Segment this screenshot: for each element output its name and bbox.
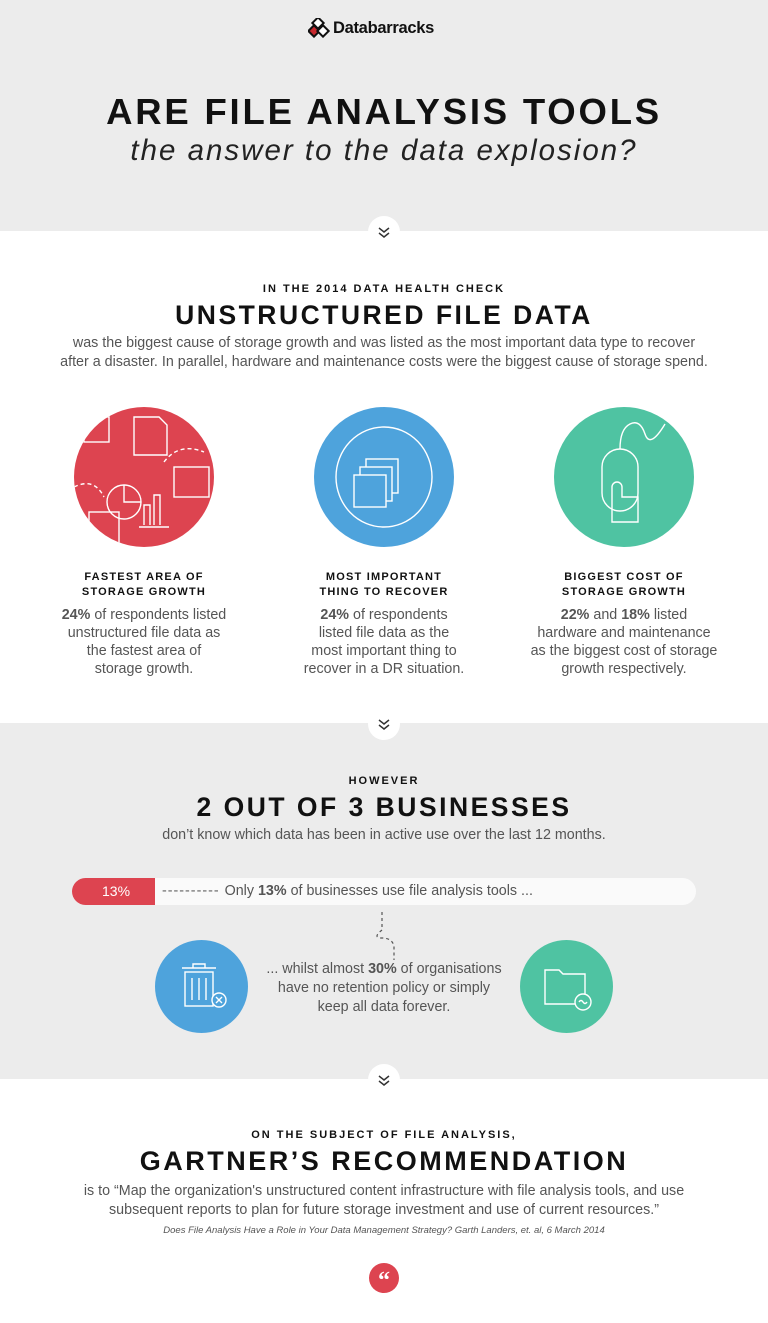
icon: quote — [369, 1263, 399, 1293]
retention text: keep all data forever. — [318, 999, 450, 1015]
icon: folder infinity circle — [520, 940, 613, 1033]
text: after a disaster. In parallel, hardware and maintenance costs were the biggest cause of storage spend. — [60, 354, 708, 370]
section heading 2: HOWEVER — [349, 775, 419, 787]
column 3 text: growth respectively. — [561, 661, 687, 677]
icon: blue recover circle — [314, 407, 454, 547]
bar: 13%: ---------- Only 13% of businesses use file analysis tools ... — [162, 883, 533, 899]
icon: red growth circle — [74, 407, 214, 547]
column 2 text: listed file data as the — [319, 625, 449, 641]
icon: quote: “ — [378, 1268, 390, 1294]
retention text: ... whilst almost 30% of organisations — [266, 961, 502, 977]
column 3 text: STORAGE GROWTH — [562, 586, 686, 598]
chevron 2 — [368, 708, 400, 740]
chevron 1 — [368, 216, 400, 248]
column 1 text: 24% of respondents listed — [62, 607, 226, 623]
column 1 text: the fastest area of — [87, 643, 201, 659]
column 3 text: hardware and maintenance — [537, 625, 711, 641]
retention text — [266, 961, 502, 1015]
icon: green mouse circle — [554, 407, 694, 547]
column 2 text: THING TO RECOVER — [319, 586, 448, 598]
text: subsequent reports to plan for future storage investment and use of current resources.” — [109, 1202, 659, 1218]
text: was the biggest cause of storage growth and was listed as the most important data type to recover — [73, 335, 695, 351]
chevron 3 — [368, 1064, 400, 1096]
column 2 text: MOST IMPORTANT — [326, 571, 442, 583]
text: don’t know which data has been in active use over the last 12 months. — [162, 827, 606, 843]
column 2 text: most important thing to — [311, 643, 457, 659]
column 1 text: STORAGE GROWTH — [82, 586, 206, 598]
bar: 13%: 13% — [102, 883, 130, 899]
column 1 text: FASTEST AREA OF — [84, 571, 204, 583]
text: 2 OUT OF 3 BUSINESSES — [196, 792, 572, 822]
section heading 3: ON THE SUBJECT OF FILE ANALYSIS, — [251, 1129, 517, 1141]
icon: trash circle — [155, 940, 248, 1033]
title: ARE FILE ANALYSIS TOOLS — [106, 91, 662, 132]
column 1 text: unstructured file data as — [68, 625, 220, 641]
bar: 13% — [72, 878, 696, 905]
logo: Databarracks — [333, 19, 434, 37]
column 2 text: 24% of respondents — [320, 607, 448, 623]
column 3 text: 22% and 18% listed — [561, 607, 687, 623]
column 3 text — [531, 571, 717, 677]
citation: Does File Analysis Have a Role in Your Data Management Strategy? Garth Landers, et. al, 6 March 2014 — [163, 1225, 605, 1236]
text: GARTNER’S RECOMMENDATION — [140, 1146, 628, 1176]
dashed connector — [376, 912, 395, 960]
text: UNSTRUCTURED FILE DATA — [175, 300, 593, 330]
retention text: have no retention policy or simply — [278, 980, 490, 996]
column 2 text: recover in a DR situation. — [304, 661, 464, 677]
column 3 text: BIGGEST COST OF — [564, 571, 684, 583]
column 3 text: as the biggest cost of storage — [531, 643, 717, 659]
subtitle: the answer to the data explosion? — [130, 134, 638, 167]
column 2 text — [304, 571, 464, 677]
column 1 text — [62, 571, 226, 677]
section heading 1: IN THE 2014 DATA HEALTH CHECK — [263, 283, 505, 295]
column 1 text: storage growth. — [95, 661, 193, 677]
text: is to “Map the organization's unstructured content infrastructure with file analysis tools, and use — [84, 1183, 684, 1199]
